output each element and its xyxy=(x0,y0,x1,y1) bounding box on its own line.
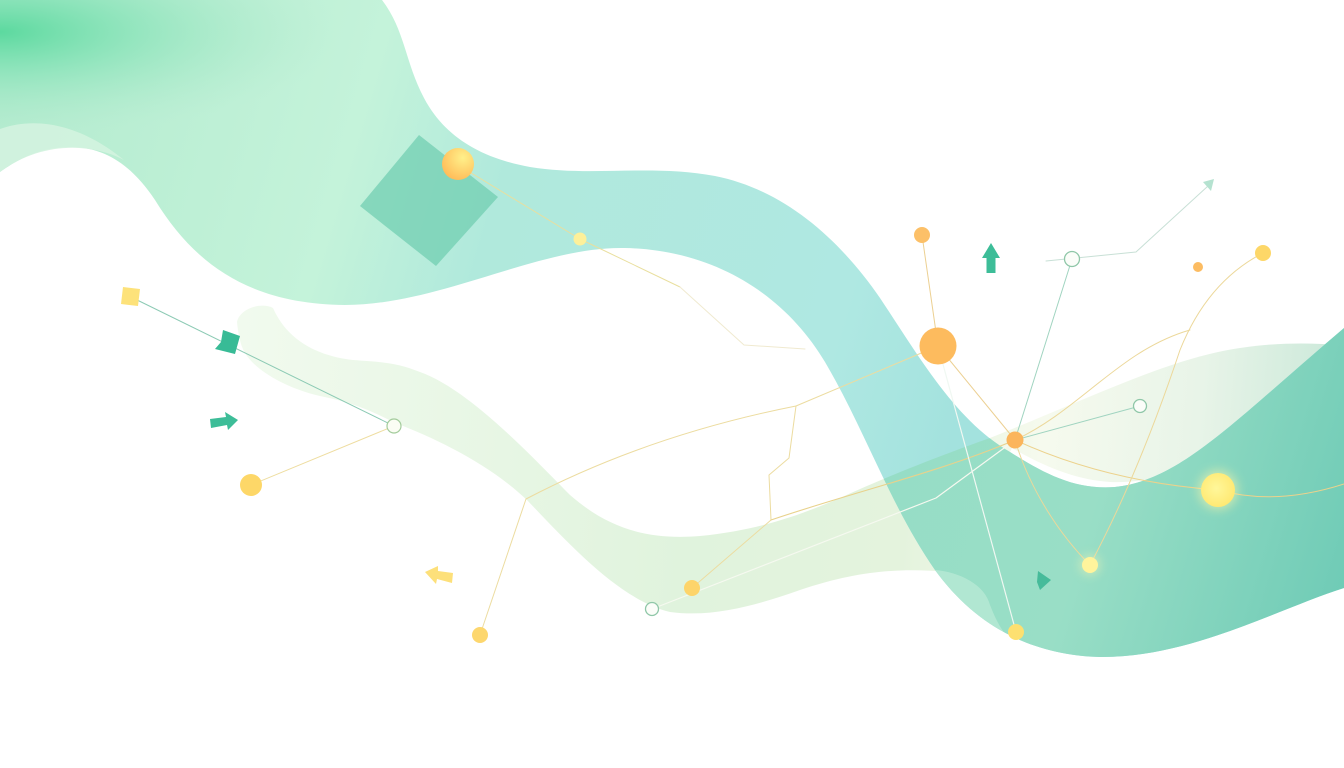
node: large hub xyxy=(920,328,956,364)
node: small orange xyxy=(1193,262,1203,272)
arrow: yellow left xyxy=(425,566,453,584)
network lines xyxy=(131,165,1344,635)
line: top node to fading trail xyxy=(458,165,680,287)
node: top bulb xyxy=(442,148,474,180)
line: teal spokes xyxy=(1015,259,1140,440)
node: open right xyxy=(1134,400,1146,412)
line: fading trail end xyxy=(680,287,805,349)
line: golden branch xyxy=(480,346,938,635)
arrow: up teal xyxy=(982,243,1000,273)
line: curve to upper right xyxy=(1015,330,1190,440)
arrow: right teal xyxy=(210,412,238,430)
line: left yellow link xyxy=(251,426,394,485)
line: curve to far right xyxy=(1015,440,1344,497)
line: curve to lower node xyxy=(1015,440,1090,565)
node: open lower xyxy=(646,602,658,616)
node: yellow square xyxy=(121,287,140,306)
node: mid orange-yellow xyxy=(684,580,700,596)
arrow: top right tip xyxy=(1203,179,1214,191)
node: orange top xyxy=(914,227,930,243)
node: large glowing xyxy=(1198,470,1238,510)
ribbon lower right section where the pale band overlaps xyxy=(884,328,1344,657)
arrow: left teal marker xyxy=(215,330,240,354)
pale ribbon crest, upper left xyxy=(0,123,124,172)
line: lower node to top right xyxy=(1090,253,1263,565)
line: crack branch xyxy=(692,406,796,588)
nodes xyxy=(121,148,1271,643)
line: top trail xyxy=(1046,186,1208,261)
node: bottom left xyxy=(472,627,488,643)
line: white diagonal xyxy=(652,440,1015,609)
node: left yellow xyxy=(240,474,262,496)
node: lower yellow xyxy=(1080,555,1100,575)
node: open left xyxy=(387,419,401,433)
line: hub spokes xyxy=(922,235,1015,440)
arrow: small teal xyxy=(1037,571,1051,590)
node: bottom yellow xyxy=(1008,624,1024,640)
pale ribbon xyxy=(237,306,1344,613)
node: top right yellow xyxy=(1255,245,1271,261)
line: left teal link xyxy=(131,297,394,426)
node: open teal top xyxy=(1064,252,1080,266)
node: small yellow xyxy=(574,232,586,246)
line: long diagonal xyxy=(771,440,1015,520)
node: hub centre xyxy=(1006,432,1024,448)
line: white spoke xyxy=(938,346,1016,632)
arrows xyxy=(210,179,1214,590)
teal square xyxy=(360,135,498,266)
